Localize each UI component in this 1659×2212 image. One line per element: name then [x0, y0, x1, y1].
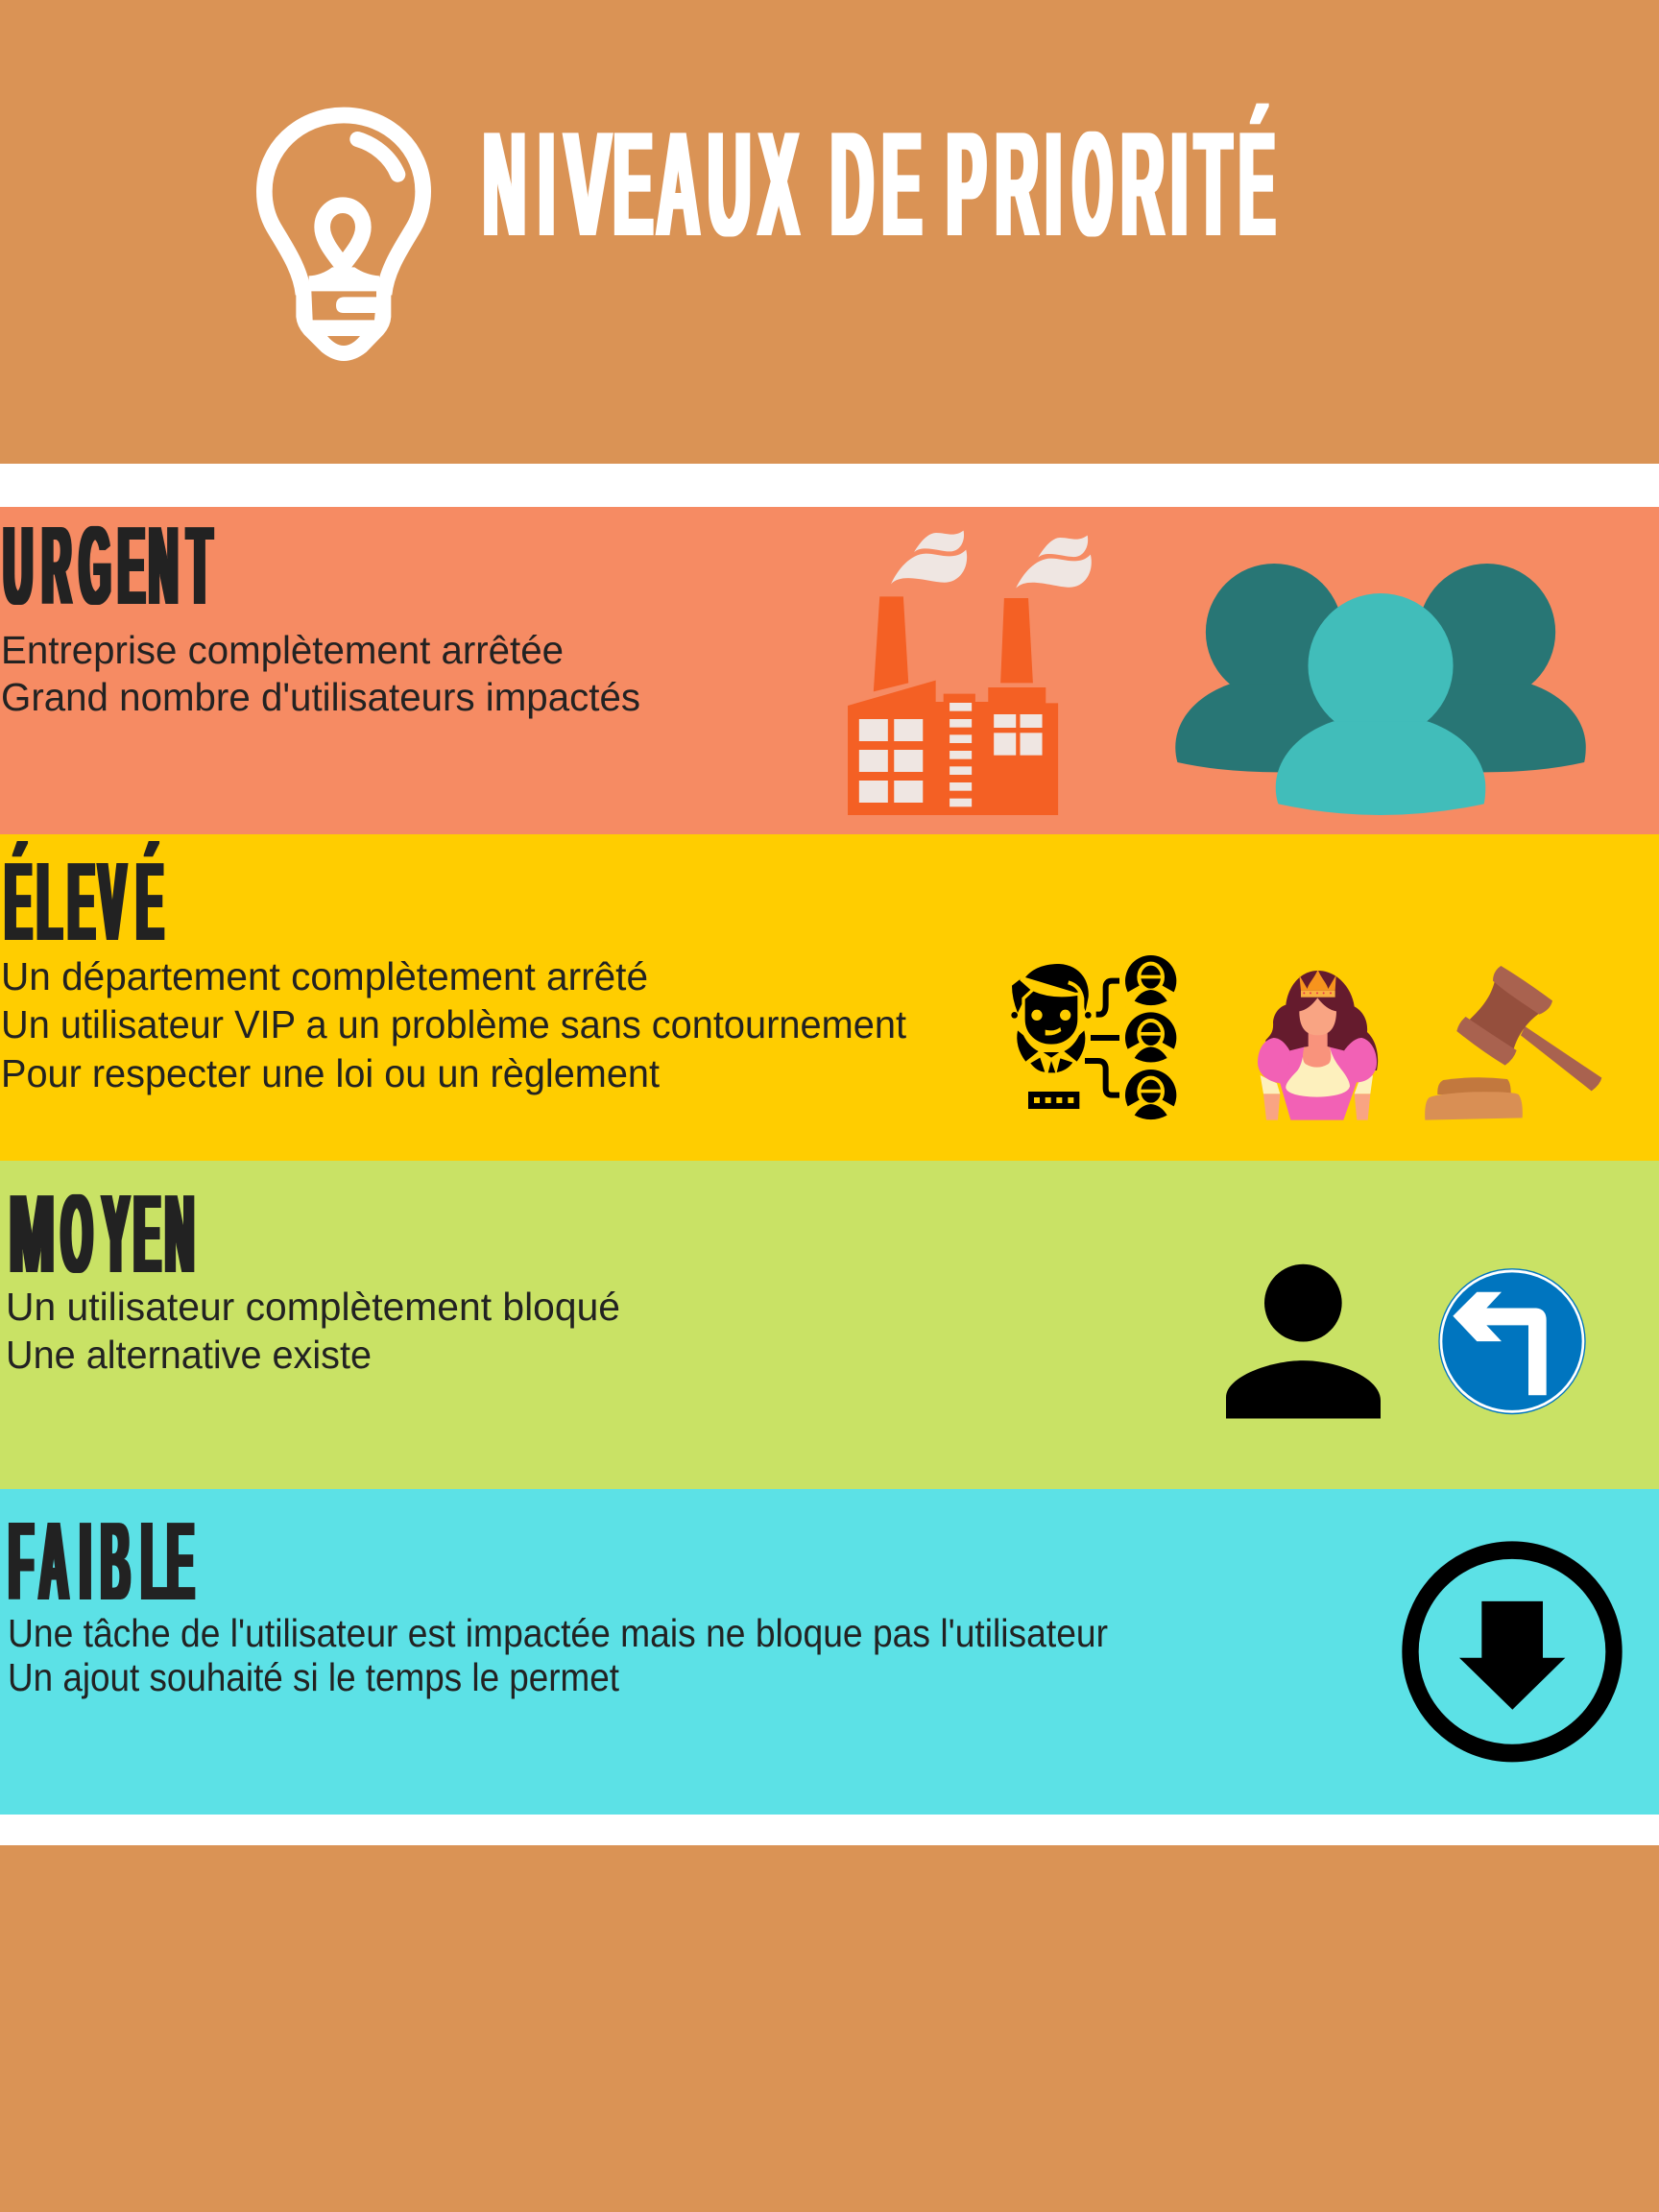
title: NIVEAUX DE PRIORITÉ [483, 102, 1275, 268]
icon: group of users [1175, 564, 1586, 815]
heading: faible: FAIBLE [9, 1500, 194, 1623]
heading: urgent: URGENT [4, 504, 212, 628]
heading: eleve: ÉLEVÉ [5, 840, 163, 964]
icon: factory [848, 531, 1092, 815]
text: urgent description [1, 628, 640, 719]
panel: footer band [0, 1845, 1659, 2212]
panel: header [0, 0, 1659, 464]
panel: urgent [0, 504, 1659, 834]
panel: faible [0, 1489, 1659, 1815]
panel: eleve [0, 834, 1659, 1161]
text: faible description: Une tâche de l'utilisateur est impactée mais ne bloque pas l'utilisateur [8, 1611, 1108, 1655]
text: eleve description: Pour respecter une loi ou un règlement [1, 1051, 661, 1095]
icon: manager with team [1011, 955, 1176, 1122]
text: faible description: Un ajout souhaité si le temps le permet [8, 1655, 620, 1699]
text: eleve description: Un département complètement arrêté [1, 954, 648, 998]
text: moyen description: Une alternative existe [6, 1333, 372, 1377]
text: moyen description: Un utilisateur complètement bloqué [6, 1285, 620, 1329]
icon: down arrow in circle [1410, 1551, 1614, 1753]
text: faible description [8, 1611, 1108, 1699]
text: moyen description [6, 1285, 620, 1377]
panel: moyen [0, 1161, 1659, 1489]
text: eleve description: Un utilisateur VIP a un problème sans contournement [1, 1002, 907, 1046]
heading: moyen: MOYEN [10, 1172, 194, 1296]
text: urgent description: Grand nombre d'utilisateurs impactés [1, 675, 640, 719]
icon: single user [1226, 1264, 1381, 1418]
text: urgent description: Entreprise complètement arrêtée [1, 628, 564, 672]
icon: left turn road sign [1438, 1268, 1586, 1414]
icon: light bulb [264, 115, 423, 361]
text: eleve description [1, 954, 907, 1095]
icon: gavel [1425, 966, 1601, 1120]
icon: queen [1258, 970, 1378, 1120]
